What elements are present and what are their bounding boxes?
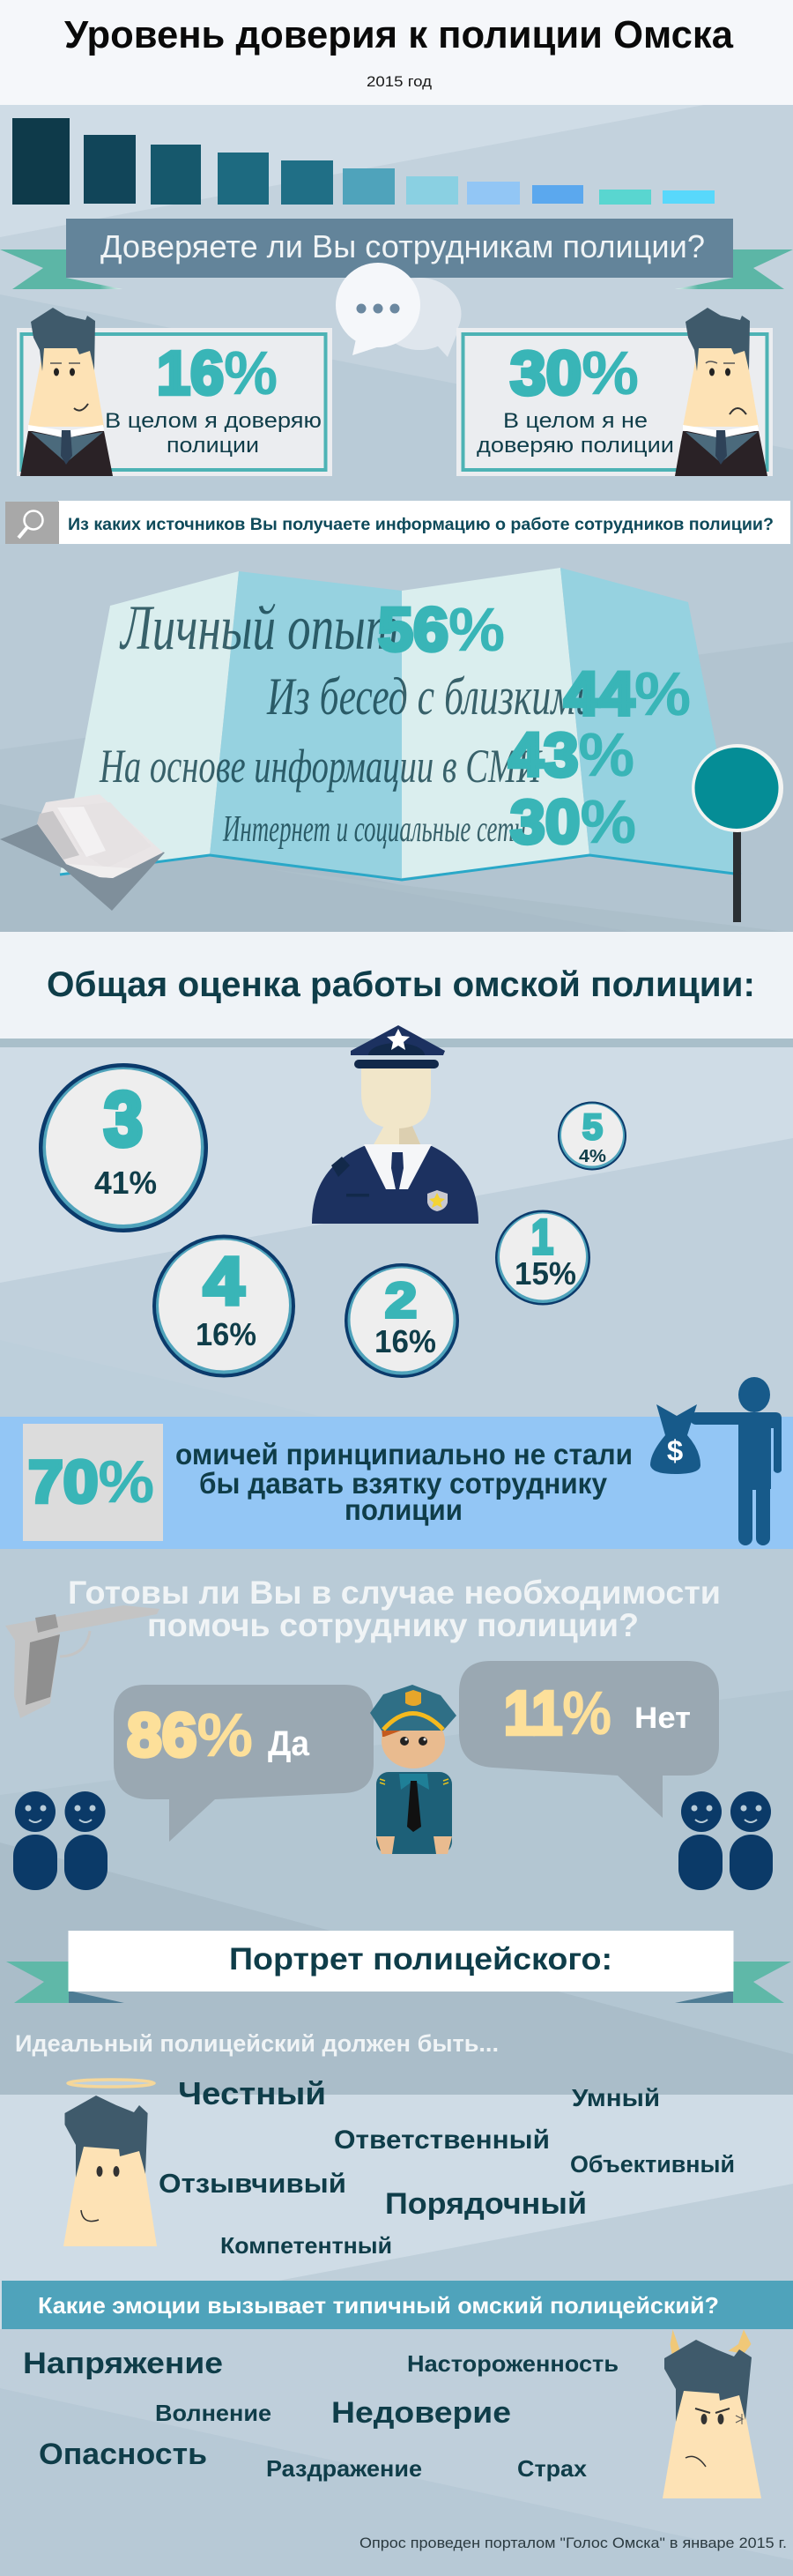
- panel: trust 16%: [17, 308, 332, 476]
- speech bubble: no: 11%: [504, 1679, 611, 1747]
- bribe text: омичей принципиально не стали: [175, 1438, 633, 1470]
- 43 percent: 43%: [508, 720, 634, 789]
- folded map chart: [60, 568, 741, 880]
- rating bubble 3: 3: [104, 1077, 143, 1162]
- ribbon banner: trust question: [0, 219, 793, 289]
- rating bubble 2: [345, 1263, 459, 1378]
- bribe text: бы давать взятку сотруднику: [199, 1467, 608, 1500]
- rating bubble 2: 16%: [374, 1323, 436, 1359]
- caption line 2: доверяю полиции: [477, 434, 674, 458]
- rating bubble 4: [152, 1234, 295, 1377]
- icon: round sign: [692, 744, 783, 922]
- ribbon banner: portrait: [6, 1931, 791, 2003]
- icon: two citizens right: [678, 1791, 773, 1890]
- word cloud: ideal qualities: Отзывчивый: [159, 2168, 346, 2199]
- word cloud: ideal qualities: Объективный: [570, 2151, 735, 2178]
- icon: man holding money bag: $: [667, 1434, 683, 1467]
- rating bubble 1: 1: [531, 1209, 553, 1264]
- icon: angel policeman: [63, 2080, 157, 2246]
- word cloud: ideal qualities: Ответственный: [334, 2126, 550, 2155]
- speech bubble: yes: Да: [268, 1724, 310, 1763]
- rating bubble 3: 41%: [94, 1165, 157, 1201]
- rating bubble 2: 2: [385, 1272, 417, 1328]
- 56 percent: 56%: [378, 595, 505, 664]
- caption: В целом я не: [503, 409, 648, 433]
- icon: pistol: [5, 1605, 159, 1718]
- rating bubble 5: 5: [582, 1106, 603, 1147]
- word cloud: ideal qualities: Порядочный: [385, 2187, 587, 2221]
- rating bubble 1: [495, 1209, 590, 1305]
- word cloud: emotions: Настороженность: [407, 2350, 619, 2377]
- figure: smiling man: [20, 308, 113, 476]
- rating bubble 4: 4: [204, 1244, 244, 1319]
- word cloud: emotions: Раздражение: [266, 2455, 422, 2482]
- 44 percent: 44%: [564, 659, 691, 728]
- search bar question: [5, 501, 790, 544]
- descending bar chart: [12, 118, 715, 205]
- 16 percent: 16%: [157, 339, 278, 407]
- icon: devil policeman: [663, 2329, 761, 2498]
- icon: papers: [0, 794, 165, 911]
- heading band: overall rating: Общая оценка работы омской полиции:: [47, 965, 755, 1004]
- icon: speech bubbles: [336, 263, 462, 357]
- figure: frowning man: [675, 308, 767, 476]
- panel: distrust 30%: [456, 308, 773, 476]
- bribe text: полиции: [345, 1493, 463, 1526]
- source: talks with relatives: Из бесед с близкими: [266, 667, 595, 726]
- source question text: Из каких источников Вы получаете информацию о работе сотрудников полиции?: [68, 515, 774, 534]
- speech bubble: no: Нет: [634, 1701, 691, 1735]
- speech bubble: yes: 86%: [127, 1701, 253, 1769]
- icon: two citizens left: [13, 1791, 107, 1890]
- band: bribe statistic: [0, 1417, 793, 1549]
- source: personal experience: Личный опыт: [120, 592, 399, 663]
- icon: police officer bust: [312, 1025, 478, 1224]
- speech bubble: yes: [114, 1685, 374, 1842]
- source: media: На основе информации в СМИ: [99, 740, 543, 793]
- ribbon banner: portrait: Портрет полицейского:: [229, 1942, 612, 1977]
- rating bubble 5: 4%: [579, 1147, 606, 1166]
- rating bubble 4: 16%: [196, 1316, 256, 1352]
- word cloud: emotions: Волнение: [155, 2400, 271, 2426]
- header band: [0, 0, 793, 105]
- subheading: ideal policeman: Идеальный полицейский должен быть...: [15, 2030, 499, 2057]
- word cloud: ideal qualities: Компетентный: [220, 2232, 392, 2259]
- title: Уровень доверия к полиции Омска: [64, 13, 734, 56]
- word cloud: ideal qualities: [159, 2075, 735, 2259]
- caption line 2: полиции: [167, 434, 259, 458]
- 70 percent: 70%: [28, 1448, 154, 1515]
- word cloud: ideal qualities: Умный: [572, 2084, 660, 2111]
- question: ready to help: [68, 1575, 721, 1643]
- icon: cartoon policeman: [370, 1685, 456, 1854]
- rating bubble 5: [558, 1102, 626, 1171]
- icon: magnifier: [19, 511, 42, 538]
- 30 percent: 30%: [510, 787, 636, 856]
- banner question text: Доверяете ли Вы сотрудникам полиции?: [100, 228, 705, 264]
- caption: В целом я доверяю: [105, 409, 322, 433]
- rating bubble 3: [39, 1063, 208, 1232]
- rating bubble 1: 15%: [515, 1255, 576, 1292]
- word cloud: emotions: Недоверие: [331, 2396, 511, 2430]
- word cloud: emotions: Опасность: [39, 2438, 207, 2471]
- question: ready to help: помочь сотруднику полиции?: [147, 1607, 639, 1643]
- 30 percent: 30%: [510, 339, 639, 407]
- year: 2015 год: [367, 73, 432, 90]
- word cloud: emotions: Страх: [517, 2455, 588, 2482]
- speech bubble: no: [459, 1661, 719, 1818]
- icon: man holding money bag: [650, 1377, 782, 1545]
- word cloud: emotions: Напряжение: [23, 2347, 223, 2380]
- word cloud: ideal qualities: Честный: [178, 2075, 326, 2111]
- question: ready to help: Готовы ли Вы в случае необходимости: [68, 1575, 721, 1611]
- word cloud: emotions: [23, 2347, 619, 2482]
- heading band: overall rating: [0, 932, 793, 1039]
- band: emotions question: Какие эмоции вызывает типичный омский полицейский?: [38, 2292, 719, 2319]
- source: internet: Интернет и социальные сети: [222, 809, 526, 850]
- footnote: Опрос проведен порталом "Голос Омска" в январе 2015 г.: [359, 2535, 787, 2551]
- band: emotions question: [2, 2281, 793, 2329]
- bribe text: [175, 1438, 633, 1526]
